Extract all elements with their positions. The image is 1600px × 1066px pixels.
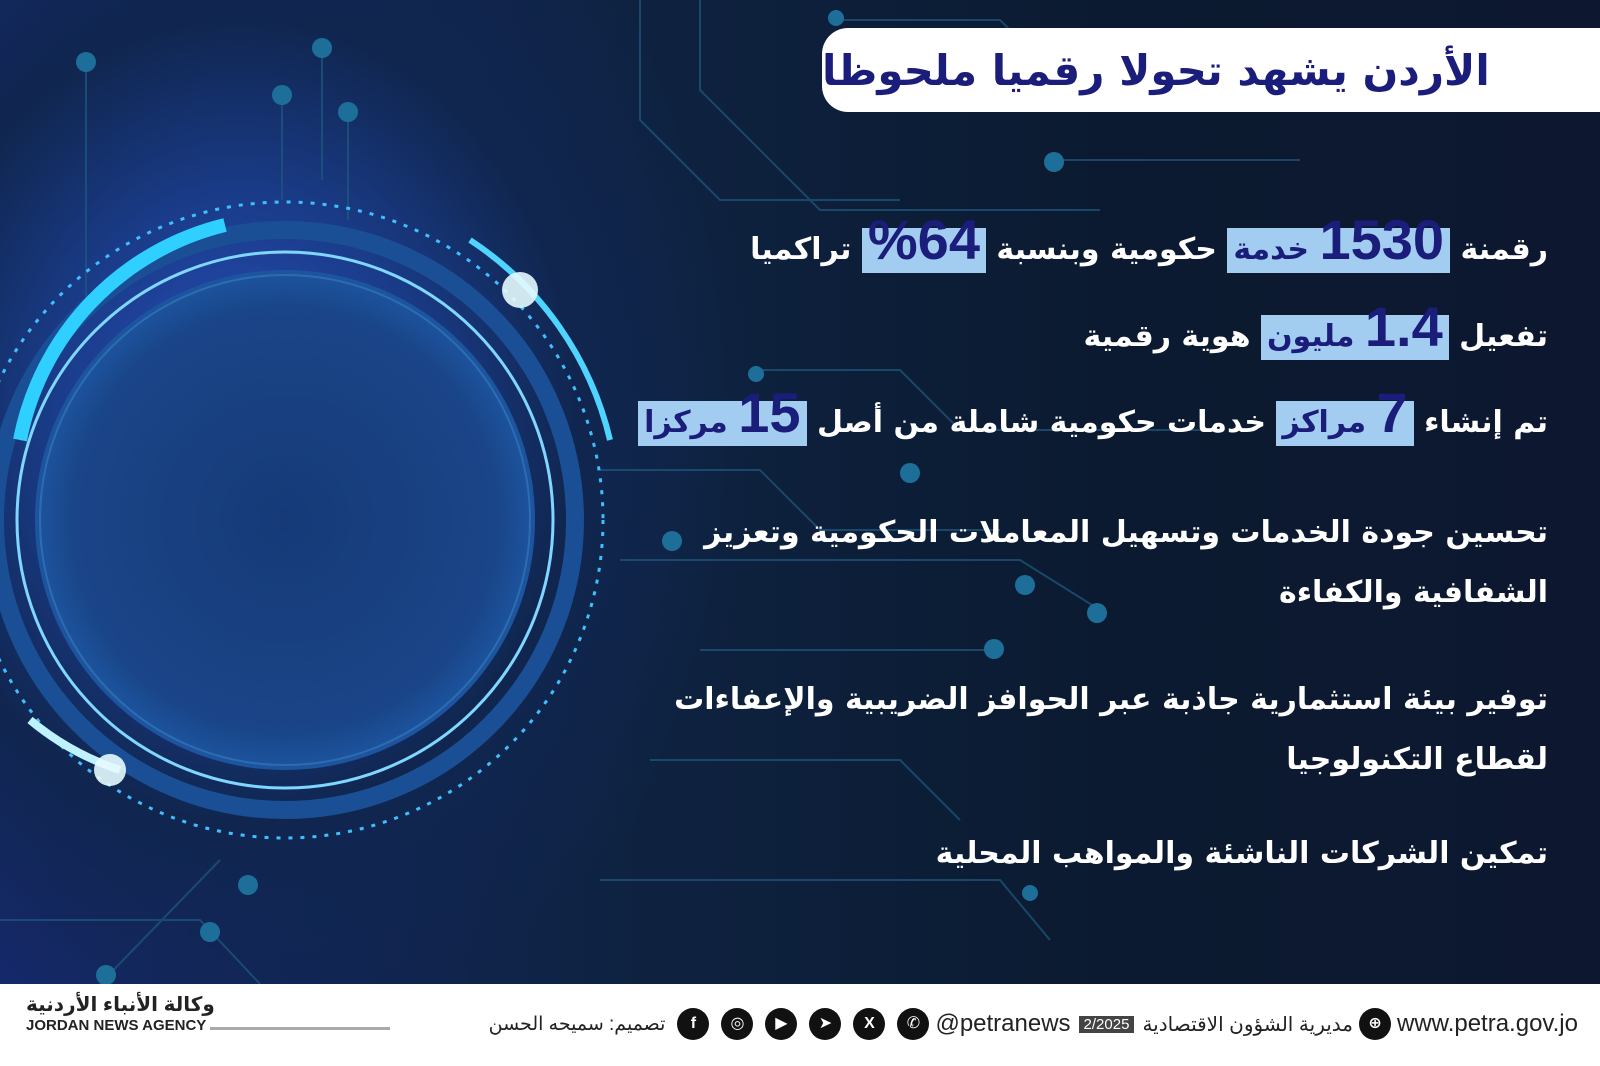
text block: line 4: تحسين جودة الخدمات وتسهيل المعاملات الحكومية وتعزيز: [704, 515, 1548, 550]
footer info: X: [864, 1015, 875, 1032]
logo: agency name: وكالة الأنباء الأردنية: [26, 994, 215, 1016]
text block: line 1: رقمنة 1530 خدمة حكومية وبنسبة 64% تراكميا: [750, 208, 1548, 271]
text block: line 5: [674, 682, 1548, 777]
footer info: تصميم: سميحه الحسن: [489, 1014, 665, 1034]
footer info: f: [691, 1015, 696, 1032]
footer info: [489, 1008, 1578, 1040]
text block: line 6: تمكين الشركات الناشئة والمواهب المحلية: [936, 836, 1548, 871]
footer info: 2/2025: [1084, 1016, 1129, 1032]
footer info: ➤: [819, 1015, 832, 1032]
icon: glowing ring: [0, 200, 613, 840]
title: الأردن يشهد تحولا رقميا ملحوظا: [822, 46, 1490, 94]
logo: agency name: JORDAN NEWS AGENCY: [26, 1017, 206, 1034]
footer info: ◎: [730, 1015, 744, 1032]
text block: line 3: تم إنشاء 7 مراكز خدمات حكومية شاملة من أصل 15 مركزا: [644, 381, 1548, 444]
footer info: ⊕: [1368, 1015, 1382, 1032]
footer info: www.petra.gov.jo: [1397, 1010, 1578, 1037]
text block: line 5: لقطاع التكنولوجيا: [1286, 742, 1548, 777]
title: [822, 28, 1600, 112]
text block: line 5: توفير بيئة استثمارية جاذبة عبر الحوافز الضريبية والإعفاءات: [674, 682, 1548, 717]
text block: line 4: الشفافية والكفاءة: [1279, 575, 1548, 610]
text block: line 2: تفعيل 1.4 مليون هوية رقمية: [1084, 295, 1548, 358]
footer info: @petranews: [935, 1010, 1071, 1037]
text block: line 4: [702, 515, 1548, 610]
footer: [0, 984, 1600, 1066]
footer info: مديرية الشؤون الاقتصادية: [1142, 1014, 1353, 1036]
footer info: ▶: [775, 1015, 788, 1032]
footer info: ✆: [907, 1015, 920, 1032]
logo: agency name: [26, 992, 215, 1034]
